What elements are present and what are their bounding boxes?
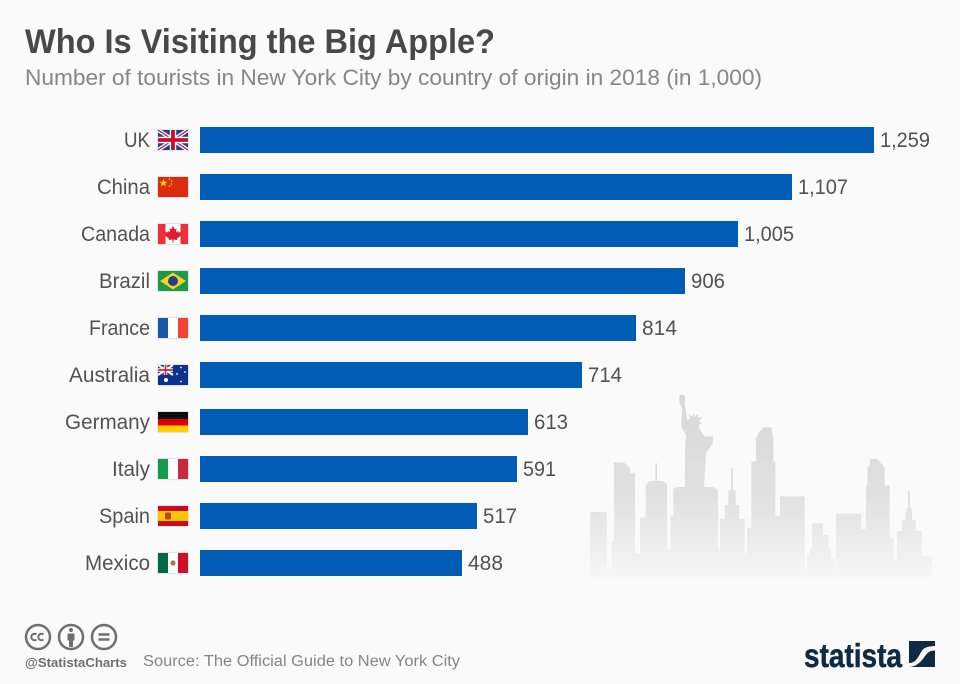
icon: creative commons licence: [26, 625, 116, 649]
icon: Spain flag: [158, 506, 188, 526]
row: UK: 1,259: [880, 128, 930, 152]
row: France: 814: [642, 316, 677, 340]
row: Spain: [99, 503, 517, 529]
icon: China flag: [158, 177, 188, 197]
icon: France flag: [158, 318, 188, 338]
icon: Italy flag: [158, 459, 188, 479]
icon: Canada flag: [158, 224, 188, 244]
icon: statista mark: [909, 641, 935, 667]
row: Mexico: [85, 550, 503, 576]
row: UK: [124, 127, 930, 153]
handle: @StatistaCharts: [25, 656, 127, 670]
row: Germany: [65, 409, 568, 435]
icon: Brazil flag: [158, 271, 188, 291]
row: Brazil: [99, 268, 725, 294]
row: Spain: 517: [483, 504, 517, 528]
row: Germany: 613: [534, 410, 568, 434]
icon: UK flag: [158, 130, 188, 150]
row: Spain: Spain: [99, 504, 150, 528]
row: China: China: [97, 175, 150, 199]
row: Italy: 591: [523, 457, 556, 481]
row: Canada: Canada: [81, 222, 150, 246]
title: Who Is Visiting the Big Apple?: [25, 23, 495, 61]
row: Canada: 1,005: [744, 222, 794, 246]
row: Canada: [81, 221, 794, 247]
icon: Germany flag: [158, 412, 188, 432]
row: Australia: 714: [588, 363, 622, 387]
row: Mexico: Mexico: [85, 551, 150, 575]
row: France: [89, 315, 677, 341]
logo: statista: statista: [804, 637, 903, 674]
icon: Australia flag: [158, 365, 188, 385]
bar chart: [65, 127, 930, 576]
row: France: France: [89, 316, 150, 340]
row: China: 1,107: [798, 175, 848, 199]
row: Australia: [69, 362, 622, 388]
row: Italy: [112, 456, 556, 482]
row: Italy: Italy: [112, 457, 150, 481]
row: China: [97, 174, 848, 200]
row: Germany: Germany: [65, 410, 150, 434]
row: Mexico: 488: [468, 551, 503, 575]
row: UK: UK: [124, 128, 151, 152]
skyline illustration: [590, 394, 932, 577]
row: Brazil: Brazil: [99, 269, 150, 293]
source: Source: The Official Guide to New York City: [143, 653, 460, 670]
icon: Mexico flag: [158, 553, 188, 573]
row: Australia: Australia: [69, 363, 150, 387]
row: Brazil: 906: [691, 269, 725, 293]
subtitle: Number of tourists in New York City by country of origin in 2018 (in 1,000): [25, 65, 762, 90]
